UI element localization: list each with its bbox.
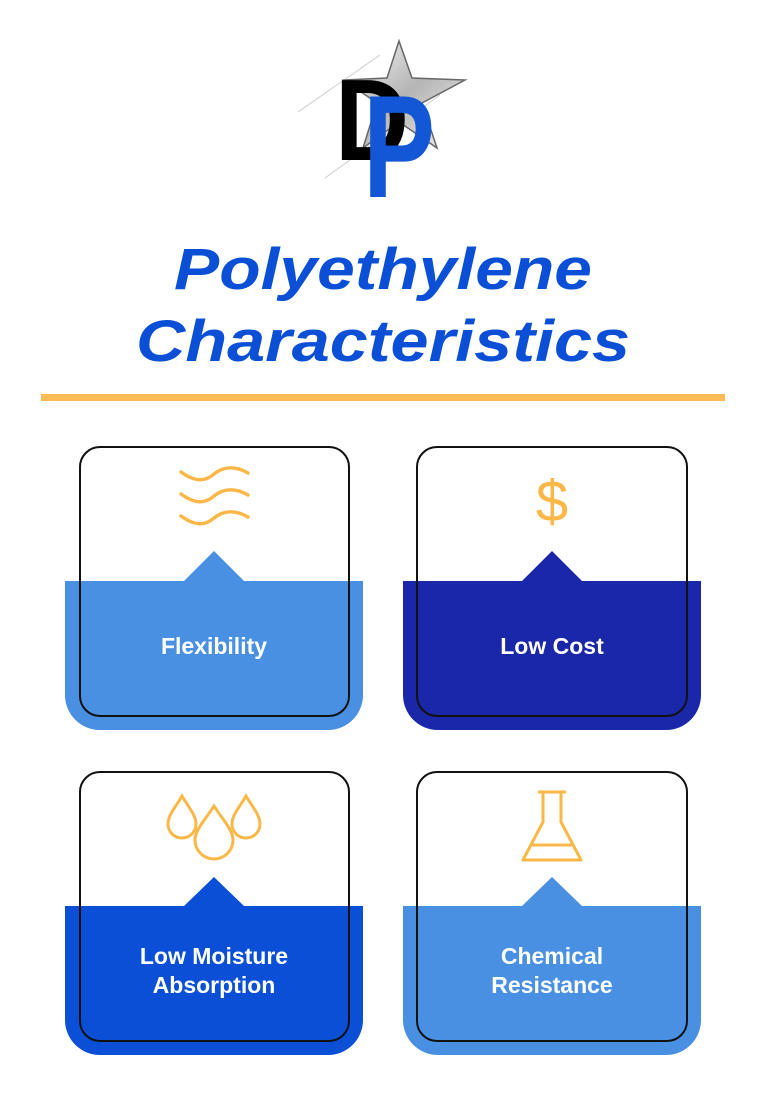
title: Characteristics [136,309,630,374]
icon: flask [523,792,581,860]
icon: drops [168,796,260,859]
card: Low Cost [403,447,701,730]
card: Low Moisture Absorption: Low Moisture [140,943,288,969]
divider [41,394,725,401]
icon: dollar: $ [536,469,568,534]
title: Polyethylene [174,237,592,302]
card: Low Moisture Absorption: Absorption [153,972,275,998]
card: Flexibility: Flexibility [161,633,267,659]
card: Chemical Resistance: Resistance [491,972,613,998]
logo [298,41,465,228]
card: Flexibility [65,447,363,730]
card: Chemical Resistance [403,772,701,1055]
card: Low Moisture Absorption [65,772,363,1055]
icon: waves [181,468,248,524]
title [136,237,630,374]
card: Chemical Resistance: Chemical [501,943,603,969]
card: Low Cost: Low Cost [500,633,604,659]
logo: P [363,65,435,228]
logo: D [335,55,409,185]
